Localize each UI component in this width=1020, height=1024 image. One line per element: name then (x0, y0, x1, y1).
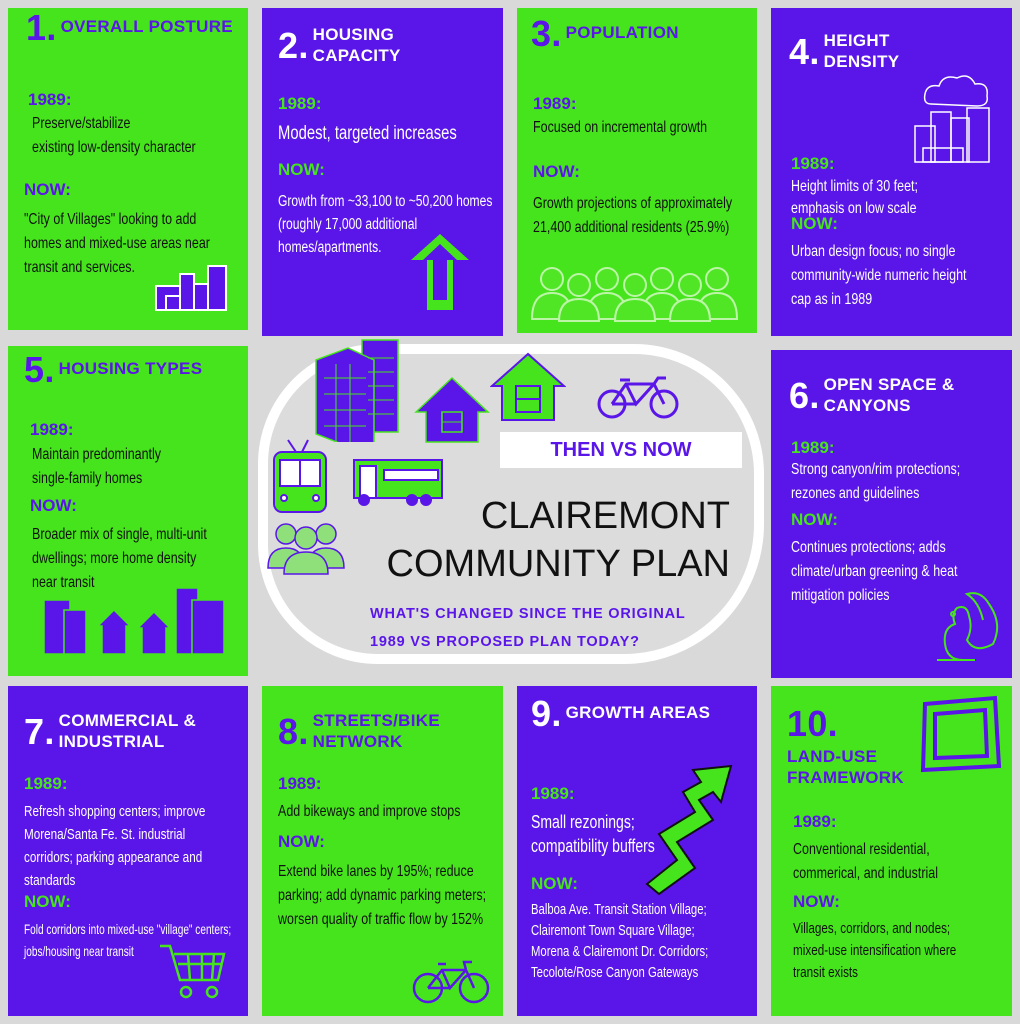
heading 8 (278, 710, 440, 752)
icon: up arrow (411, 234, 469, 310)
label 1989: 1989: (24, 774, 67, 793)
text 1989: Small rezonings; (531, 812, 635, 832)
panel 3: population (517, 8, 757, 333)
heading 2: CAPACITY (313, 46, 401, 65)
text now (32, 526, 207, 591)
panel 5: housing types (8, 346, 248, 676)
text now (791, 243, 966, 308)
icon: frame (920, 696, 1002, 772)
icon: people (531, 267, 738, 322)
subtitle question (370, 600, 686, 656)
heading 7: COMMERCIAL & (59, 711, 196, 730)
text now: cap as in 1989 (791, 291, 872, 308)
heading 4: DENSITY (824, 52, 899, 71)
text now: jobs/housing near transit (24, 943, 134, 959)
icon: shopping cart (160, 944, 226, 998)
text now: Fold corridors into mixed-use "village" centers; (24, 921, 231, 937)
text 1989: emphasis on low scale (791, 200, 917, 217)
heading 5: 5.HOUSING TYPES (24, 349, 202, 390)
text 1989 (24, 803, 205, 889)
text now (531, 902, 708, 981)
subtitle question: 1989 VS PROPOSED PLAN TODAY? (370, 634, 640, 650)
label now: NOW: (791, 214, 838, 233)
icon: buildings (315, 339, 399, 442)
title: CLAIREMONT (481, 495, 730, 537)
text 1989: existing low-density character (32, 139, 196, 156)
text 1989 (531, 812, 655, 856)
text now: Extend bike lanes by 195%; reduce (278, 863, 474, 880)
label 1989: 1989: (28, 90, 71, 109)
text now: "City of Villages" looking to add (24, 211, 196, 228)
text now: Balboa Ave. Transit Station Village; (531, 902, 707, 918)
icon: zigzag arrow (646, 764, 732, 896)
text 1989: Add bikeways and improve stops (278, 803, 460, 820)
text 1989 (791, 461, 960, 502)
heading 10: LAND-USE (787, 747, 877, 766)
heading 3: 3.POPULATION (531, 13, 679, 54)
panel 7: commercial and industrial (8, 686, 248, 1016)
heading 8: STREETS/BIKE (313, 711, 440, 730)
heading 7: 7. (24, 710, 55, 752)
heading 4: 4. (789, 30, 820, 72)
subtitle banner: then vs now (500, 432, 742, 468)
text now (533, 195, 732, 236)
label 1989: 1989: (531, 784, 574, 803)
text 1989: Preserve/stabilize (32, 115, 130, 132)
text 1989 (793, 841, 938, 882)
text now: Morena & Clairemont Dr. Corridors; (531, 944, 708, 960)
label now: NOW: (793, 892, 840, 911)
icon: buildings and houses (44, 588, 224, 654)
text now: parking; add dynamic parking meters; (278, 887, 486, 904)
heading 7 (24, 710, 196, 752)
label now: NOW: (24, 892, 71, 911)
icon: squirrel (937, 592, 998, 661)
panel 6: open space and canyons (771, 350, 1012, 678)
heading 2 (278, 24, 401, 66)
text 1989 (32, 446, 161, 487)
text 1989: Maintain predominantly (32, 446, 161, 463)
text now: Villages, corridors, and nodes; (793, 920, 950, 937)
text 1989 (32, 115, 196, 156)
label 1989: 1989: (278, 94, 321, 113)
text now (24, 921, 231, 959)
panel 8: streets and bike network (262, 686, 503, 1016)
panel 10: land-use framework (771, 686, 1012, 1016)
subtitle question: WHAT'S CHANGED SINCE THE ORIGINAL (370, 606, 686, 622)
panel 4: height density (771, 8, 1012, 336)
text 1989: Strong canyon/rim protections; (791, 461, 960, 478)
icon: cloud and buildings (914, 75, 990, 163)
heading 1: 1.OVERALL POSTURE (26, 7, 233, 48)
icon: bar chart (155, 265, 227, 311)
text now: transit and services. (24, 259, 135, 276)
text now: (roughly 17,000 additional (278, 216, 417, 233)
text now: homes/apartments. (278, 239, 381, 256)
text now: 21,400 additional residents (25.9%) (533, 219, 729, 236)
label now: NOW: (533, 162, 580, 181)
text now: homes and mixed-use areas near (24, 235, 210, 252)
text now: Continues protections; adds (791, 539, 946, 556)
text 1989: corridors; parking appearance and (24, 849, 202, 866)
label now: NOW: (531, 874, 578, 893)
text 1989: Modest, targeted increases (278, 123, 457, 144)
text now: dwellings; more home density (32, 550, 196, 567)
label 1989: 1989: (791, 154, 834, 173)
icon: trolley (268, 438, 332, 518)
text now: Urban design focus; no single (791, 243, 955, 260)
text 1989: compatibility buffers (531, 836, 655, 856)
title: COMMUNITY PLAN (387, 543, 730, 585)
label 1989: 1989: (278, 774, 321, 793)
panel 9: growth areas (517, 686, 757, 1016)
text now: Growth from ~33,100 to ~50,200 homes (278, 193, 492, 210)
text now: transit exists (793, 964, 858, 981)
text now: climate/urban greening & heat (791, 563, 958, 580)
heading 7: INDUSTRIAL (59, 732, 165, 751)
label 1989: 1989: (793, 812, 836, 831)
subtitle banner: then vs now: THEN VS NOW (550, 439, 692, 461)
icon: green house (490, 350, 566, 424)
panel 1: overall posture (8, 8, 248, 330)
text now (278, 193, 492, 256)
text 1989: commerical, and industrial (793, 865, 938, 882)
text now: worsen quality of traffic flow by 152% (278, 911, 483, 928)
text 1989: Morena/Santa Fe. St. industrial (24, 826, 185, 843)
icon: people (266, 520, 346, 576)
heading 6: OPEN SPACE & (824, 375, 954, 394)
text 1989: Refresh shopping centers; improve (24, 803, 205, 820)
icon: purple house (414, 377, 490, 443)
text now (24, 211, 210, 276)
text now: Tecolote/Rose Canyon Gateways (531, 965, 698, 981)
heading 4: HEIGHT (824, 31, 890, 50)
text 1989: standards (24, 872, 75, 889)
text now: near transit (32, 574, 94, 591)
text 1989: rezones and guidelines (791, 485, 919, 502)
title (387, 492, 730, 588)
icon: bus (350, 454, 446, 510)
panel 2: housing capacity (262, 8, 503, 336)
heading 10 (787, 703, 904, 787)
heading 9: 9.GROWTH AREAS (531, 693, 710, 734)
label 1989: 1989: (30, 420, 73, 439)
text now: mixed-use intensification where (793, 942, 956, 959)
heading 10: 10. (787, 703, 838, 744)
blob background (258, 344, 764, 664)
icon: bicycle (596, 374, 682, 420)
heading 4 (789, 30, 899, 72)
heading 6 (789, 374, 954, 416)
label now: NOW: (24, 180, 71, 199)
label now: NOW: (278, 832, 325, 851)
text 1989: Focused on incremental growth (533, 119, 707, 136)
label now: NOW: (278, 160, 325, 179)
text 1989 (791, 178, 918, 217)
text now: mitigation policies (791, 587, 889, 604)
heading 2: 2. (278, 24, 309, 66)
center panel: title blob (258, 339, 764, 664)
text now (791, 539, 958, 604)
label now: NOW: (30, 496, 77, 515)
text now: Growth projections of approximately (533, 195, 732, 212)
text now: Clairemont Town Square Village; (531, 923, 695, 939)
text now: community-wide numeric height (791, 267, 966, 284)
text now (278, 863, 486, 928)
text now (793, 920, 956, 981)
text 1989: single-family homes (32, 470, 142, 487)
text 1989: Height limits of 30 feet; (791, 178, 918, 195)
text now: Broader mix of single, multi-unit (32, 526, 207, 543)
label now: NOW: (791, 510, 838, 529)
text 1989: Conventional residential, (793, 841, 930, 858)
heading 10: FRAMEWORK (787, 768, 904, 787)
heading 2: HOUSING (313, 25, 394, 44)
heading 8: 8. (278, 710, 309, 752)
heading 6: 6. (789, 374, 820, 416)
label 1989: 1989: (533, 94, 576, 113)
heading 8: NETWORK (313, 732, 403, 751)
heading 6: CANYONS (824, 396, 911, 415)
label 1989: 1989: (791, 438, 834, 457)
icon: bicycle (412, 960, 490, 1004)
